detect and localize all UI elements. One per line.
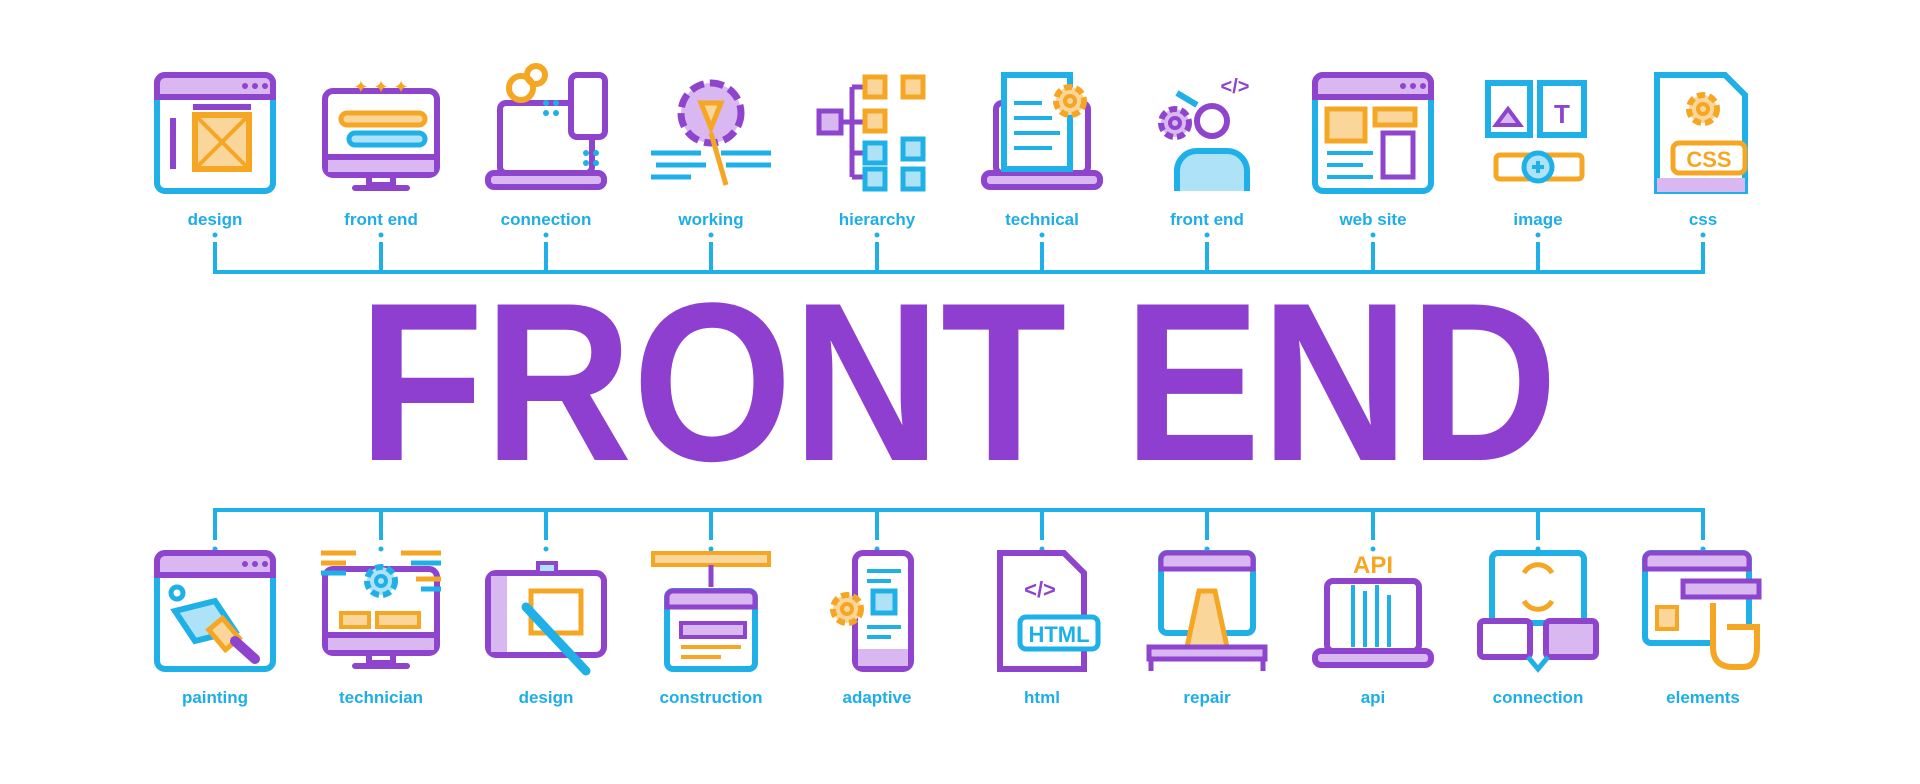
icon: image xyxy=(1488,83,1584,181)
bottom labels xyxy=(182,688,1740,707)
icon: connection laptops xyxy=(1480,553,1596,669)
icon: technical xyxy=(984,75,1100,187)
top labels: image xyxy=(1513,210,1563,229)
icon: front end person: </> xyxy=(1221,76,1249,98)
icon: html: </> xyxy=(1024,577,1056,602)
top labels: css xyxy=(1689,210,1717,229)
title: FRONT END xyxy=(358,255,1558,508)
icon: css: CSS xyxy=(1686,147,1732,172)
icon: html xyxy=(1000,553,1098,669)
bottom labels: api xyxy=(1361,688,1385,707)
icon: connection xyxy=(488,66,605,187)
top labels: connection xyxy=(501,210,591,229)
bottom labels: repair xyxy=(1183,688,1231,707)
icon: css xyxy=(1657,75,1745,192)
icon: adaptive xyxy=(833,553,911,669)
icon: hierarchy xyxy=(819,77,923,189)
icon: technician xyxy=(321,553,441,666)
top labels: web site xyxy=(1338,210,1407,229)
icon: front end person xyxy=(1161,76,1249,191)
bottom connector xyxy=(212,510,1706,552)
bottom labels: construction xyxy=(660,688,762,707)
icon: api: API xyxy=(1353,552,1393,579)
bottom labels: painting xyxy=(182,688,248,707)
top labels: front end xyxy=(344,210,418,229)
icon: web site xyxy=(1315,75,1431,191)
bottom labels: connection xyxy=(1493,688,1583,707)
icon: design xyxy=(157,75,273,191)
icon: image: T xyxy=(1554,99,1570,129)
bottom labels: technician xyxy=(339,688,423,707)
bottom labels: elements xyxy=(1666,688,1740,707)
icon: html: HTML xyxy=(1028,622,1090,647)
top labels: working xyxy=(677,210,744,229)
bottom labels: design xyxy=(519,688,573,707)
icon: design tablet xyxy=(488,563,604,671)
icon: painting xyxy=(157,553,273,669)
bottom labels: adaptive xyxy=(843,688,911,707)
bottom labels: html xyxy=(1024,688,1060,707)
icon: front end monitor xyxy=(325,77,437,188)
top labels: hierarchy xyxy=(839,210,916,229)
top connector xyxy=(212,232,1706,272)
icon: api xyxy=(1315,552,1431,665)
top labels: technical xyxy=(1005,210,1079,229)
icon: working xyxy=(651,83,771,185)
icon: construction xyxy=(653,553,769,669)
top labels: design xyxy=(188,210,242,229)
icon: elements xyxy=(1645,553,1759,667)
icon: front end monitor: ✦ ✦ ✦ xyxy=(353,77,409,97)
icon: repair xyxy=(1149,553,1265,671)
top labels xyxy=(188,210,1717,229)
top labels: front end xyxy=(1170,210,1244,229)
